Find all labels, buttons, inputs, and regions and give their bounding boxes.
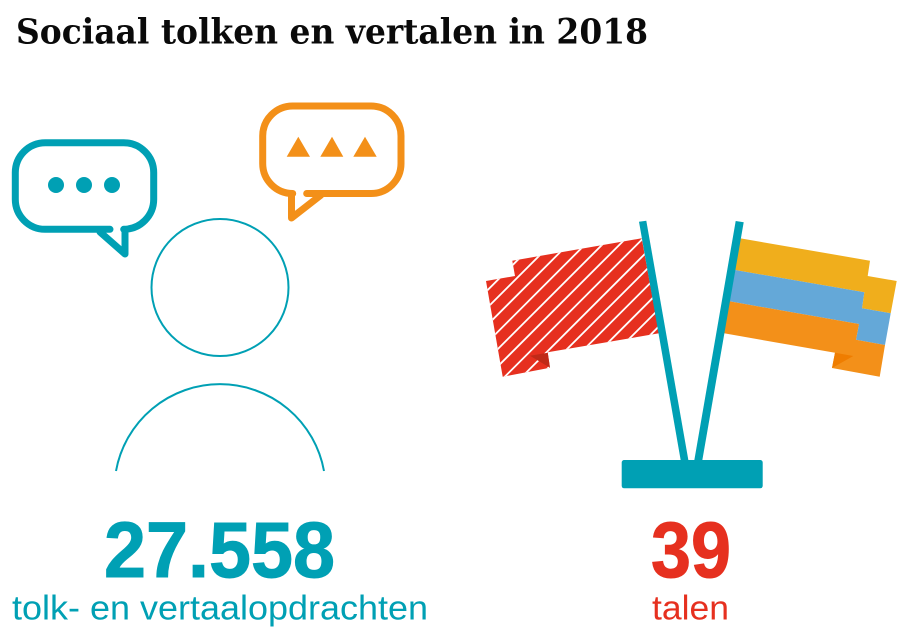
icon: flag stand bbox=[622, 221, 763, 488]
label: languages: talen bbox=[652, 590, 729, 628]
stat: number of languages: 39 bbox=[651, 505, 731, 594]
label: assignments: tolk- en vertaalopdrachten bbox=[12, 590, 428, 628]
title: Sociaal tolken en vertalen in 2018 bbox=[16, 12, 648, 52]
icon: teal speech bubble bbox=[15, 143, 154, 254]
icon: red striped flag bbox=[486, 238, 658, 377]
stat: number of assignments: 27.558 bbox=[104, 505, 335, 594]
icon: orange speech bubble bbox=[263, 106, 401, 218]
icon: tricolour flag bbox=[724, 238, 897, 377]
icon: person bbox=[116, 219, 324, 471]
